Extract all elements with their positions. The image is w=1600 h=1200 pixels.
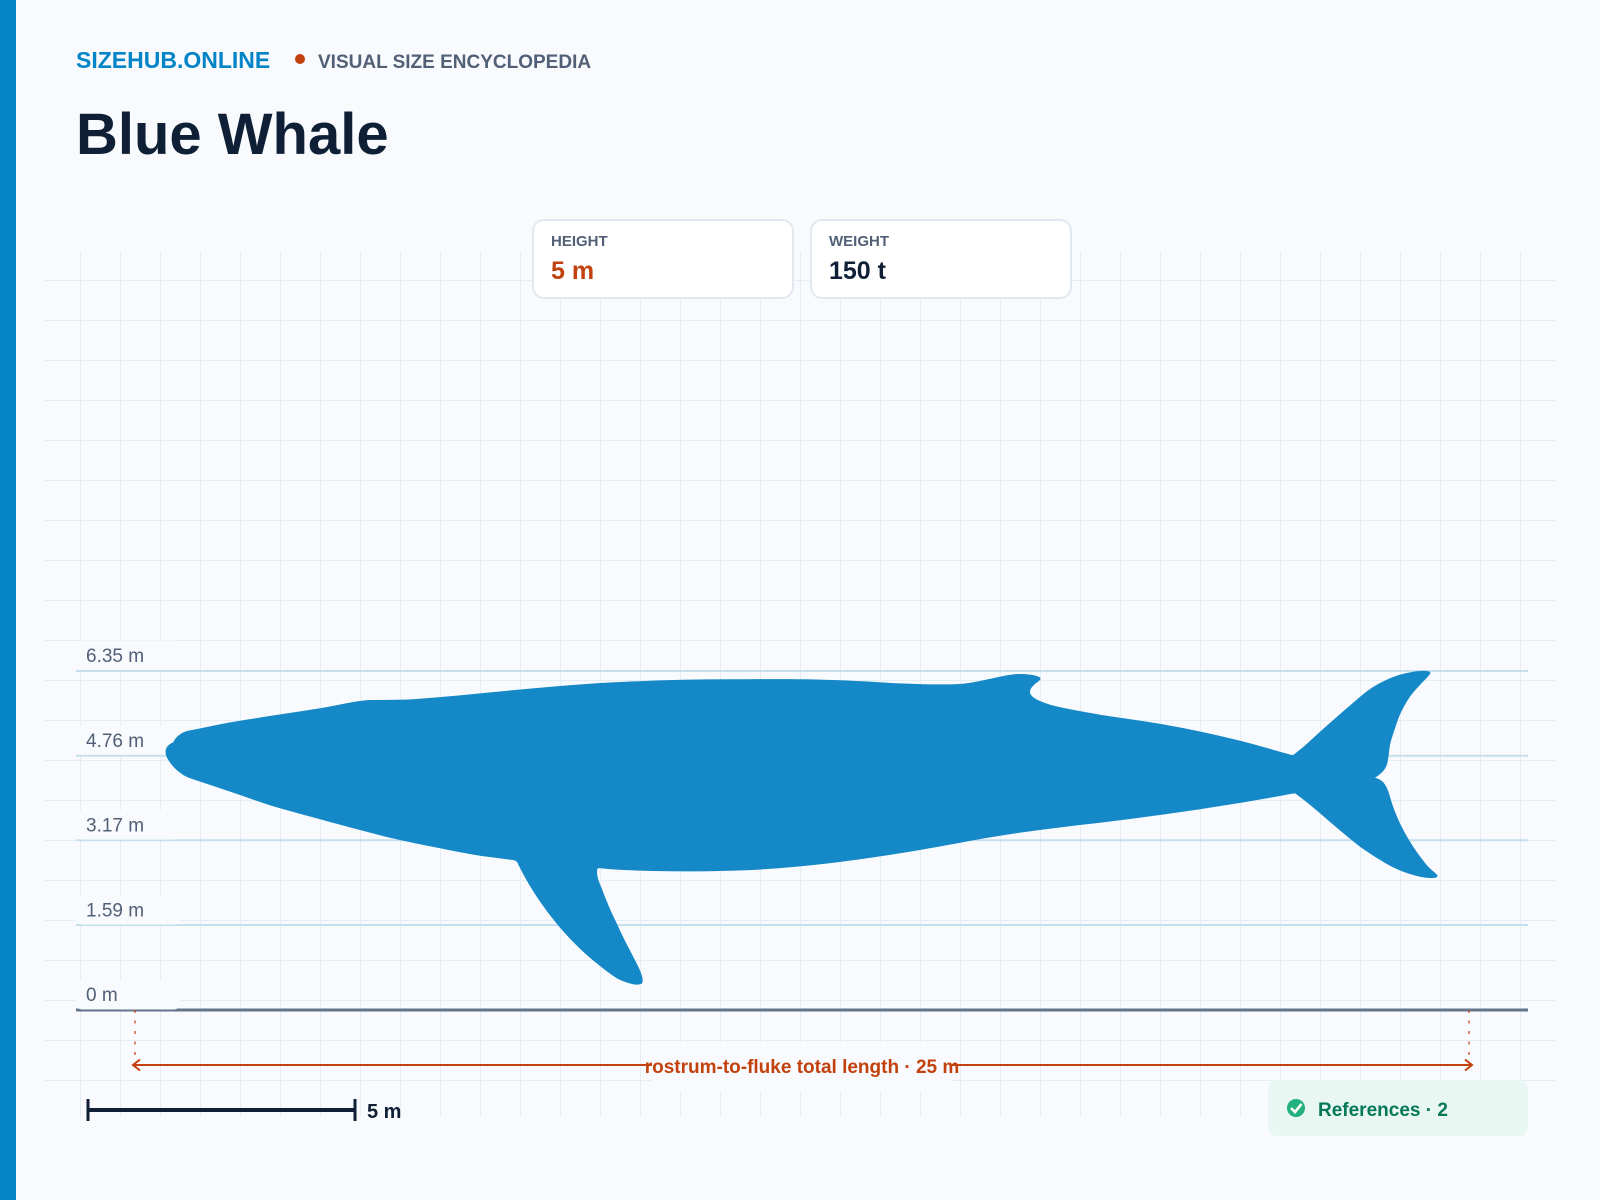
dimension label backing: [652, 1043, 952, 1091]
references badge: [1268, 1080, 1528, 1136]
title: Blue Whale: [76, 102, 389, 167]
brand dot: [295, 54, 305, 64]
tagline: VISUAL SIZE ENCYCLOPEDIA: [318, 52, 591, 73]
brand line: [76, 47, 591, 73]
dimension arrow: [133, 1060, 1472, 1070]
whale silhouette: [166, 671, 1438, 985]
right drop line: [1468, 1010, 1470, 1056]
label 4.76 m: 4.76 m: [86, 731, 144, 752]
scale bar label: 5 m: [367, 1101, 401, 1123]
references text: References · 2: [1318, 1100, 1448, 1121]
dimension label: rostrum-to-fluke total length · 25 m: [645, 1057, 959, 1078]
label 0 m: [76, 980, 180, 1010]
label 6.35 m: [76, 640, 180, 670]
weight label: WEIGHT: [829, 233, 889, 250]
label 3.17 m: 3.17 m: [86, 816, 144, 836]
label 1.59 m: [76, 895, 180, 924]
height reference lines: [76, 671, 1528, 925]
accent bar: [0, 0, 16, 1200]
height label: HEIGHT: [551, 233, 608, 250]
label 1.59 m: 1.59 m: [86, 900, 144, 921]
length dimension: [133, 1010, 1472, 1091]
label 6.35 m: 6.35 m: [86, 646, 144, 667]
ground line: [76, 1008, 1528, 1012]
height value: 5 m: [551, 257, 594, 285]
stat card: weight: [811, 220, 1071, 298]
label 0 m: 0 m: [86, 985, 118, 1006]
scale bar: [88, 1099, 401, 1123]
scale bar line: [88, 1108, 355, 1112]
label 3.17 m: [76, 810, 180, 840]
icon: check circle: [1287, 1099, 1305, 1117]
brand name: SIZEHUB.ONLINE: [76, 47, 270, 73]
label 4.76 m: [76, 725, 180, 755]
stat card: height: [533, 220, 793, 298]
left drop line: [134, 1010, 136, 1056]
weight value: 150 t: [829, 257, 887, 285]
height axis labels: [76, 640, 180, 1010]
